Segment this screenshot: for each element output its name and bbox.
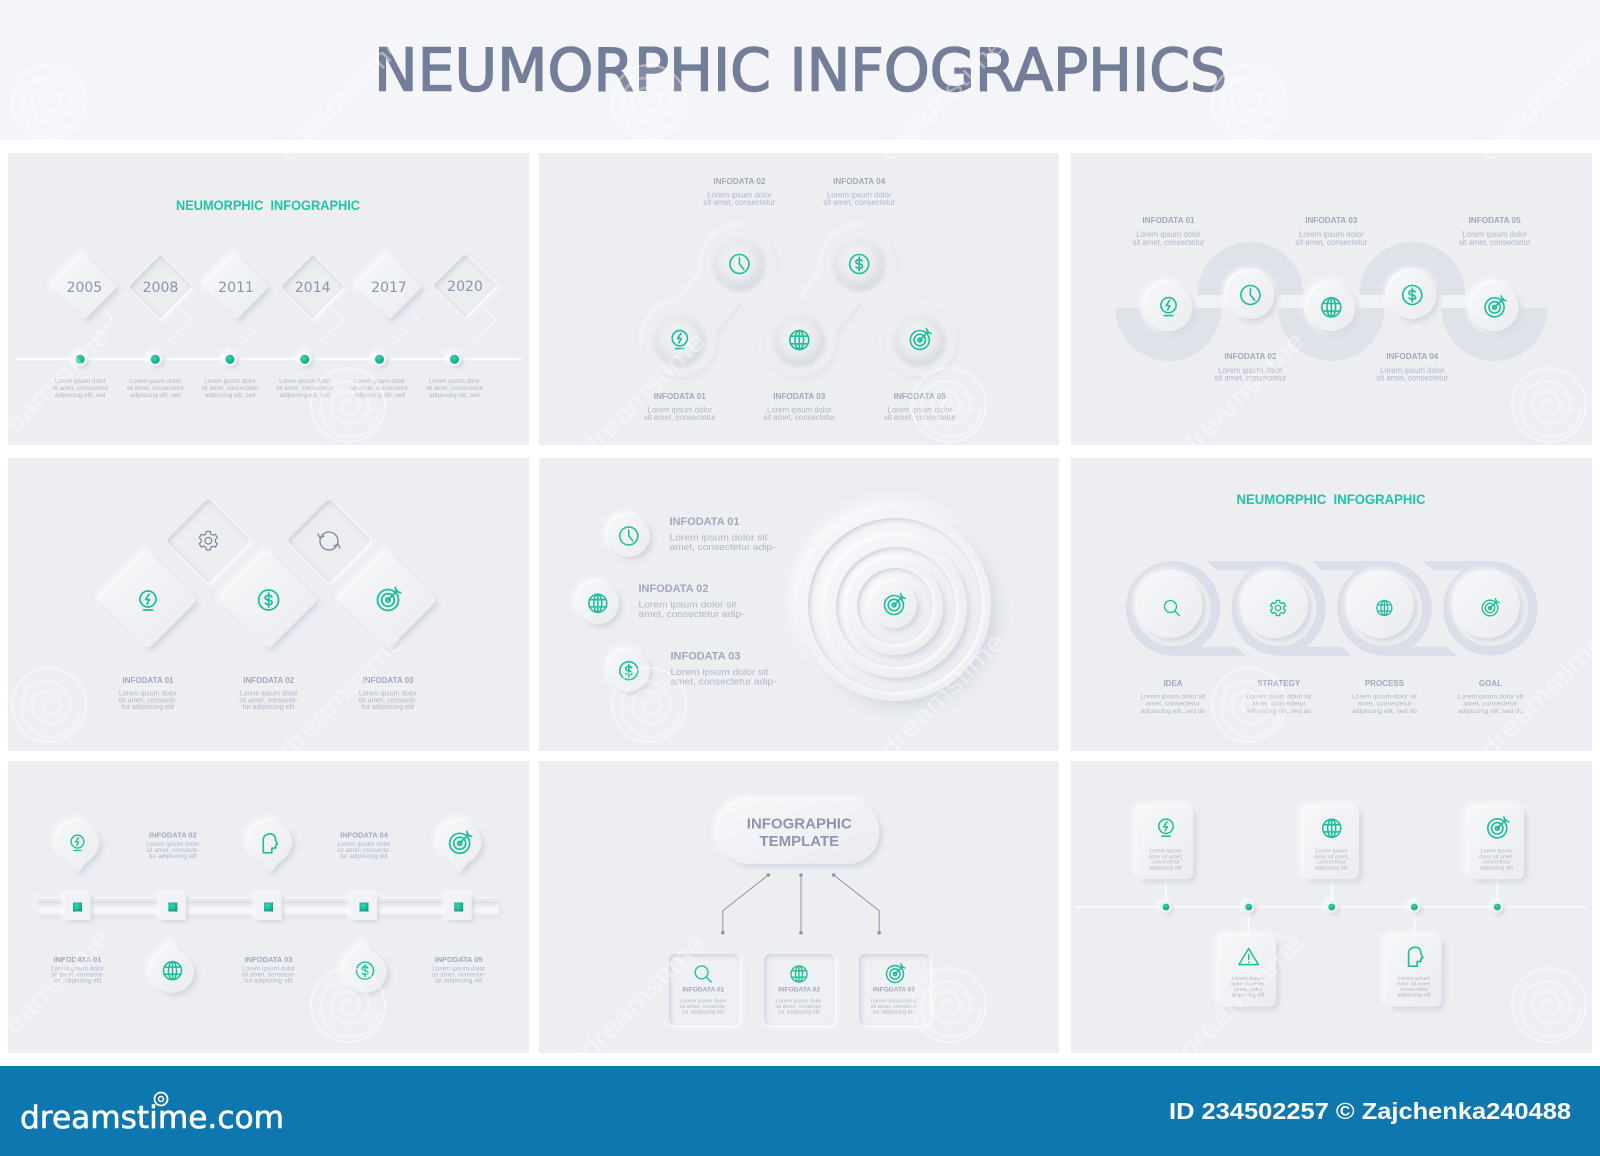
label: Infodata 02: Lorem ipsum dolor	[146, 841, 200, 848]
label: Infodata 02: tur adipiscing elit	[243, 704, 295, 711]
watermark: diagonal text: dreamstime	[1172, 325, 1310, 463]
timeline captions: sit amet, consectetur	[426, 385, 483, 392]
label: Infodata 01: sit amet, consectetur	[1133, 238, 1205, 247]
card: globe: consectetur	[1317, 860, 1346, 866]
raised diamond: bulb	[105, 557, 191, 643]
label: Process: amet, consectetur	[1357, 700, 1412, 708]
label: Infodata 01: Lorem ipsum dolor	[1136, 230, 1201, 239]
label: Infodata 05	[432, 955, 486, 984]
label: Infodata 05: sit amet, consectetur	[884, 413, 956, 422]
card: target	[1469, 807, 1524, 879]
label: Infodata 03: tur adipiscing elit	[245, 977, 293, 984]
label: Goal: amet, consectetur	[1463, 700, 1518, 708]
label: Infodata 03: sit amet, consecte-	[242, 971, 295, 978]
label: Infodata 02: INFODATA 02	[1224, 352, 1277, 361]
label: Strategy: STRATEGY	[1257, 679, 1301, 688]
diamond 2011	[207, 258, 265, 316]
inset diamond: refresh	[293, 505, 365, 577]
timeline captions: sit amet, consectetur	[276, 385, 333, 392]
label: Infodata 01: INFODATA 01	[1142, 216, 1195, 225]
header band	[0, 0, 1600, 140]
card: target: adipiscing elit	[1480, 865, 1513, 871]
timeline dots	[73, 352, 461, 366]
label: Goal: adipiscing elit, sed do	[1458, 708, 1523, 715]
label: Infodata 01: sit amet, consecte-	[51, 971, 104, 978]
diamond 2014	[285, 259, 341, 315]
diamond 2011: 2011	[218, 280, 254, 296]
timeline captions: adipiscing elit, sed	[130, 392, 181, 399]
label: Infodata 01: sit amet, consecte-	[119, 697, 178, 704]
label: Infodata 02: sit amet, consecte-	[239, 697, 299, 704]
label: Infodata 02: Lorem ipsum dolor	[1218, 366, 1283, 375]
label: Infodata 05: INFODATA 05	[435, 955, 483, 964]
pin: target	[438, 821, 482, 873]
label: Infodata 03	[763, 392, 836, 422]
timeline captions: Lorem ipsum dolor	[130, 378, 181, 385]
label: Infodata 03: Lorem ipsum dolor	[1299, 230, 1364, 239]
box: Infodata 02	[764, 954, 835, 1025]
label: Infodata 02: sit amet, consectetur	[1214, 374, 1287, 382]
label: Process	[1352, 679, 1417, 715]
node: globe	[1307, 283, 1355, 331]
card: bulb	[1138, 807, 1193, 879]
label: Infodata 01: sit amet, consectetur	[644, 413, 716, 422]
label: Infodata 03: amet, consectetur adip-	[670, 676, 776, 688]
label: Infodata 03	[670, 650, 776, 688]
timeline captions: Lorem ipsum dolor	[204, 378, 256, 385]
watermark: diagonal text: dreamstime	[272, 626, 410, 764]
panel: card timeline	[1071, 761, 1592, 1053]
label: Infodata 03: sit amet, consectetur	[763, 413, 836, 422]
label: Strategy	[1246, 679, 1311, 715]
card: warning	[1220, 936, 1276, 1007]
label: Infodata 02: sit amet, consectetur	[703, 198, 776, 207]
diamond 2008	[132, 259, 188, 315]
label: Infodata 02: amet, consectetur adip-	[638, 609, 744, 620]
label: Infodata 04: sit amet, consectetur	[1376, 374, 1449, 382]
panel: connected spheres	[539, 153, 1059, 445]
label: Process: Lorem ipsum dolor sit	[1352, 694, 1417, 700]
card: bulb: adipiscing elit	[1149, 865, 1182, 871]
label: Process: adipiscing elit, sed do	[1352, 708, 1417, 715]
label: Infodata 05	[884, 392, 956, 422]
timeline captions: Lorem ipsum dolor	[354, 378, 405, 385]
card: warning: adipiscing elit	[1231, 993, 1265, 999]
label: Idea: IDEA	[1163, 679, 1183, 688]
node: dollar	[608, 650, 650, 692]
label: Infodata 05: INFODATA 05	[894, 392, 946, 401]
label: Infodata 05	[1459, 216, 1531, 247]
connectors	[721, 873, 881, 934]
label: Infodata 04: sit amet, consecte-	[337, 847, 391, 854]
box: Infodata 01: tur adipiscing elit	[682, 1010, 724, 1016]
box: Infodata 02: tur adipiscing elit	[778, 1010, 820, 1016]
panel: year timeline	[8, 153, 529, 445]
label: Idea: adipiscing elit, sed do	[1140, 708, 1206, 715]
label: Infodata 05: Lorem ipsum dolor	[888, 406, 952, 414]
node: target	[1471, 283, 1519, 331]
label: Infodata 02: tur adipiscing elit	[149, 853, 197, 860]
label: Infodata 03: INFODATA 03	[773, 392, 826, 401]
box: Infodata 01: sit amet, consecte-	[680, 1004, 727, 1010]
node: bulb	[1144, 283, 1192, 331]
label: Infodata 03: INFODATA 03	[363, 676, 414, 685]
card: head: adipiscing elit	[1397, 993, 1431, 999]
label: Idea: Lorem ipsum dolor sit	[1141, 694, 1206, 700]
label: Infodata 05: sit amet, consecte-	[432, 971, 486, 978]
track nodes	[64, 894, 472, 920]
label: Infodata 03	[242, 955, 296, 984]
watermark: diagonal text: dreamstime	[1172, 927, 1310, 1065]
sphere: bulb	[654, 315, 706, 367]
connectors	[89, 310, 496, 344]
label: Infodata 04	[337, 830, 391, 860]
label: Infodata 04: INFODATA 04	[833, 177, 886, 186]
node: dollar	[1388, 271, 1436, 319]
card: globe	[1304, 807, 1359, 879]
label: Infodata 01: INFODATA 01	[54, 955, 101, 964]
pill heading	[718, 800, 880, 864]
label: Infodata 05: Lorem ipsum dolor	[432, 965, 486, 972]
panel: diamond tiles	[8, 458, 529, 751]
card: globe: adipiscing elit	[1315, 865, 1348, 871]
raised diamond: dollar	[226, 557, 312, 643]
node: clock	[1226, 271, 1274, 319]
connecting strip	[1190, 295, 1480, 308]
label: Goal: GOAL	[1479, 679, 1502, 688]
card: bulb: Lorem ipsum	[1150, 849, 1182, 855]
pin: dollar	[343, 941, 387, 993]
label: Infodata 03: INFODATA 03	[245, 955, 292, 964]
label: Infodata 01: Lorem ipsum dolor	[648, 406, 712, 414]
label: Strategy: adipiscing elit, sed do	[1246, 708, 1311, 715]
card: warning: Lorem ipsum	[1232, 976, 1264, 982]
inset diamond: gear	[172, 505, 244, 577]
label: Infodata 05: Lorem ipsum dolor	[1462, 230, 1527, 239]
card: globe: dolor sit amet,	[1314, 854, 1349, 860]
card: target: Lorem ipsum	[1481, 849, 1513, 855]
watermark: diagonal text: dreamstime	[573, 325, 711, 463]
box: Infodata 01: Lorem ipsum dolor	[680, 998, 726, 1004]
pill heading: TEMPLATE	[759, 833, 839, 850]
diamond 2005	[55, 258, 113, 316]
button: target	[1453, 571, 1527, 645]
label: Infodata 03: Lorem ipsum dolor	[767, 406, 832, 414]
panel: wave timeline	[1071, 153, 1592, 445]
watermark: diagonal text: dreamstime	[873, 626, 1011, 764]
card: head: Lorem ipsum	[1398, 976, 1430, 982]
label: Infodata 01: tur adipiscing elit	[122, 704, 174, 711]
heading: NEUMORPHIC INFOGRAPHIC	[1236, 491, 1426, 507]
label: Infodata 04: Lorem ipsum dolor	[1380, 366, 1445, 375]
footer credit: ID 234502257 © Zajchenka240488	[1169, 1098, 1571, 1124]
label: Infodata 03	[1295, 216, 1368, 247]
timeline line	[15, 358, 522, 360]
button: search	[1136, 571, 1210, 645]
sphere: dollar	[833, 239, 885, 291]
label: Infodata 02: INFODATA 02	[638, 583, 708, 595]
diamond 2005: 2005	[67, 280, 102, 296]
label: Infodata 02	[703, 177, 776, 207]
button: gear	[1242, 571, 1316, 645]
card: target: dolor sit amet,	[1479, 854, 1514, 860]
card: warning: dolor sit amet,	[1231, 982, 1266, 988]
label: Infodata 01	[670, 516, 776, 553]
label: Infodata 04: tur adipiscing elit	[340, 853, 388, 860]
label: Infodata 04: Lorem ipsum dolor	[827, 190, 892, 200]
box: Infodata 03: tur adipiscing elit	[873, 1010, 915, 1016]
sphere: clock	[713, 239, 765, 291]
label: Infodata 03	[359, 676, 418, 711]
label: Infodata 01	[1133, 216, 1205, 247]
label: Infodata 01: Lorem ipsum dolor	[51, 965, 105, 972]
timeline captions: sit amet, consectetur	[127, 385, 184, 392]
ring chain	[1130, 561, 1533, 656]
footer band	[0, 1066, 1600, 1156]
label: Infodata 05: sit amet, consectetur	[1459, 238, 1531, 247]
blob connector	[643, 227, 957, 377]
label: Infodata 04: sit amet, consectetur	[823, 198, 896, 207]
timeline captions: Lorem ipsum dolor	[429, 378, 480, 385]
box: Infodata 01: INFODATA 01	[682, 986, 725, 994]
label: Infodata 03: Lorem ipsum dolor sit	[670, 667, 769, 678]
label: Infodata 04: INFODATA 04	[1386, 352, 1439, 361]
timeline line and stems	[1076, 879, 1587, 936]
node: globe	[577, 582, 619, 624]
node: clock	[608, 515, 650, 557]
box: Infodata 02: sit amet, consecte-	[776, 1004, 823, 1010]
label: Infodata 03: tur adipiscing elit	[362, 704, 414, 711]
label: Infodata 02: INFODATA 02	[713, 177, 766, 186]
timeline captions: sit amet, consectetur	[201, 385, 259, 392]
footer logo: dreamstime.com	[20, 1100, 284, 1136]
label: Infodata 04	[823, 177, 896, 207]
box: Infodata 03: INFODATA 03	[873, 986, 915, 994]
card: bulb: dolor sit amet,	[1148, 854, 1183, 860]
diamond 2017: 2017	[371, 280, 407, 296]
label: Infodata 02: Lorem ipsum dolor	[707, 190, 772, 200]
label: Strategy: Lorem ipsum dolor sit	[1246, 694, 1311, 700]
watermark: diagonal text: dreamstime	[272, 29, 410, 167]
label: Goal	[1458, 679, 1523, 715]
label: Infodata 01: INFODATA 01	[654, 392, 706, 401]
label: Infodata 02: Lorem ipsum dolor sit	[638, 600, 737, 610]
heading: NEUMORPHIC INFOGRAPHIC	[176, 197, 360, 213]
label: Infodata 03: INFODATA 03	[670, 650, 740, 662]
label: Infodata 02	[638, 583, 744, 620]
pin: globe	[150, 941, 194, 993]
label: Infodata 01: INFODATA 01	[123, 676, 174, 685]
timeline captions	[52, 378, 483, 399]
card: warning: consectetur	[1234, 987, 1262, 993]
label: Infodata 01: tur adipiscing elit	[54, 977, 102, 984]
title: NEUMORPHIC INFOGRAPHICS	[374, 36, 1227, 105]
sphere: globe	[773, 315, 825, 367]
button: globe	[1347, 571, 1421, 645]
label: Infodata 03: sit amet, consecte-	[359, 697, 418, 704]
raised diamond: target	[345, 557, 431, 643]
watermark: diagonal text: dreamstime	[573, 927, 711, 1065]
card: head	[1386, 936, 1442, 1007]
card: globe: Lorem ipsum	[1316, 849, 1348, 855]
diamond 2020	[437, 258, 493, 314]
timeline captions: sit amet, consectetur	[351, 385, 408, 392]
label: Infodata 02: INFODATA 02	[149, 830, 197, 840]
panel: concentric target	[539, 458, 1059, 751]
label: Infodata 02	[146, 830, 200, 860]
label: Infodata 02	[1214, 352, 1287, 382]
label: Infodata 01	[119, 676, 178, 711]
panel: pin timeline	[8, 761, 529, 1053]
timeline captions: sit amet, consectetur	[52, 385, 109, 392]
label: Infodata 02: Lorem ipsum dolor	[240, 690, 298, 698]
label: Infodata 01: Lorem ipsum dolor	[119, 690, 178, 698]
label: Goal: Lorem ipsum dolor sit	[1458, 694, 1523, 700]
diamond 2014: 2014	[295, 280, 331, 296]
label: Process: PROCESS	[1365, 679, 1405, 688]
label: Infodata 01: Lorem ipsum dolor sit	[670, 532, 768, 544]
card: head: consectetur	[1400, 987, 1428, 993]
watermark: diagonal text: dreamstime	[1473, 29, 1600, 167]
timeline captions: adipiscing elit, sed	[429, 392, 480, 399]
card: bulb: consectetur	[1151, 860, 1180, 866]
label: Idea: amet, consectetur	[1146, 700, 1201, 708]
label: Infodata 03: sit amet, consectetur	[1295, 238, 1368, 247]
card: head: dolor sit amet,	[1397, 982, 1432, 988]
label: Infodata 03: Lorem ipsum dolor	[359, 690, 418, 698]
timeline captions: Lorem ipsum dolor	[279, 378, 330, 385]
label: Infodata 04: INFODATA 04	[340, 830, 389, 840]
box: Infodata 03	[859, 954, 929, 1025]
panel: ring process	[1071, 458, 1592, 751]
label: Infodata 02: sit amet, consecte-	[146, 847, 200, 854]
timeline captions: adipiscing elit, sed	[354, 392, 405, 399]
label: Infodata 02	[239, 676, 299, 711]
watermark: diagonal text: dreamstime	[873, 29, 1011, 167]
timeline captions: adipiscing elit, sed	[55, 392, 106, 399]
timeline captions: Lorem ipsum dolor	[55, 378, 106, 385]
label: Infodata 02: INFODATA 02	[243, 676, 295, 685]
concentric circles	[799, 509, 991, 701]
label: Strategy: amet, consectetur	[1252, 700, 1306, 708]
pin: bulb	[56, 821, 100, 873]
pill heading: INFOGRAPHIC	[747, 816, 852, 832]
box: Infodata 02: Lorem ipsum dolor	[776, 998, 822, 1004]
label: Idea	[1140, 679, 1206, 715]
card: target: consectetur	[1482, 860, 1511, 866]
label: Infodata 03: INFODATA 03	[1305, 216, 1358, 225]
diamond 2020: 2020	[447, 279, 483, 295]
timeline captions: adipiscing elit, sed	[205, 392, 256, 399]
label: Infodata 01: INFODATA 01	[670, 516, 740, 528]
label: Infodata 03: Lorem ipsum dolor	[242, 965, 296, 972]
timeline captions: adipiscing elit, sed	[280, 392, 331, 399]
panel: org template	[539, 761, 1059, 1053]
sphere: target	[894, 315, 946, 367]
diamond 2008: 2008	[143, 280, 178, 296]
box: Infodata 03: Lorem ipsum dolor	[871, 998, 917, 1004]
wave band	[1128, 255, 1535, 348]
box: Infodata 02: INFODATA 02	[778, 986, 820, 994]
label: Infodata 01: amet, consectetur adip-	[670, 542, 776, 553]
label: Infodata 04: Lorem ipsum dolor	[338, 841, 391, 848]
track	[37, 898, 499, 915]
label: Infodata 05: tur adipiscing elit	[435, 977, 483, 984]
icon: target	[884, 594, 905, 614]
diamond 2017	[360, 258, 418, 316]
label: Infodata 05: INFODATA 05	[1469, 216, 1521, 225]
box: Infodata 03: sit amet, consecte-	[871, 1004, 918, 1010]
watermark: diagonal text: dreamstime	[1473, 626, 1600, 764]
label: Infodata 04	[1376, 352, 1449, 382]
label: Infodata 01	[644, 392, 716, 422]
box: Infodata 01	[669, 954, 739, 1025]
label: Infodata 01	[51, 955, 105, 984]
pin: head	[248, 821, 292, 873]
timeline dots	[1160, 901, 1503, 913]
